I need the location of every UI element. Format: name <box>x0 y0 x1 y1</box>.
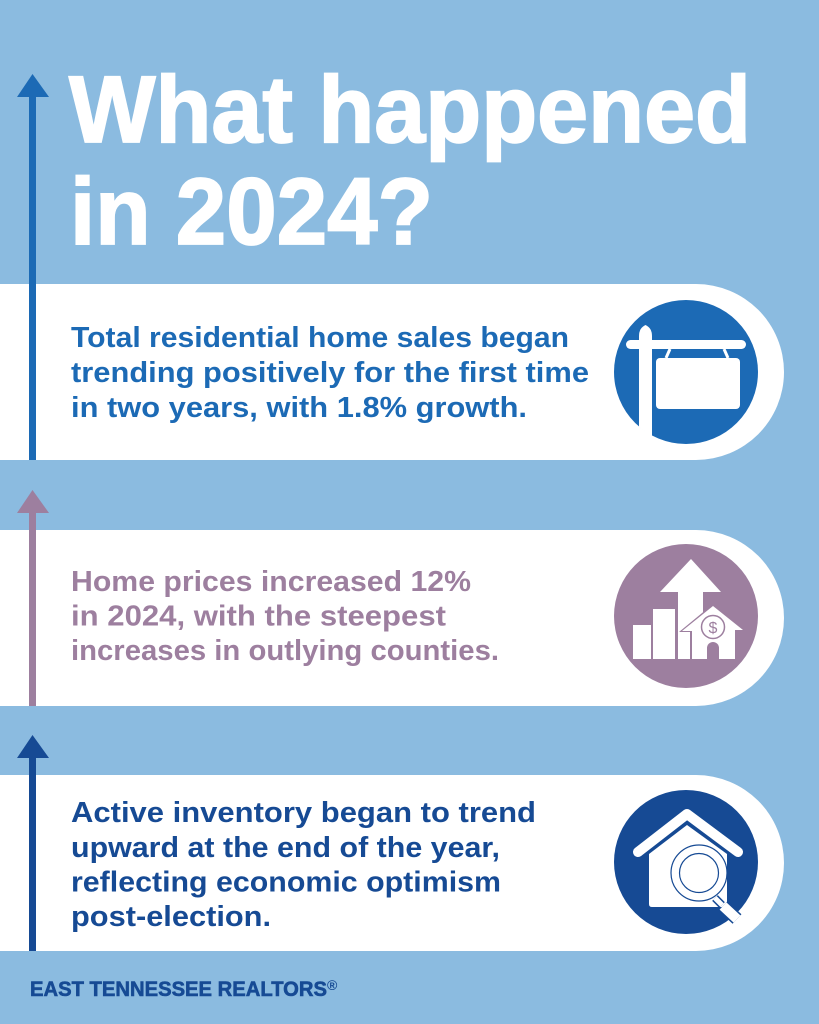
arrow: mauve <box>17 490 49 706</box>
footer logo text: EAST TENNESSEE REALTORS <box>30 978 327 1001</box>
text: home prices <box>71 566 499 667</box>
icon: house with magnifier <box>614 790 758 934</box>
title: in 2024? <box>70 159 433 265</box>
text: home prices: increases in outlying counties. <box>71 635 499 667</box>
text: home sales: trending positively for the first time <box>71 357 589 389</box>
footer logo text: ® <box>327 977 338 993</box>
title <box>69 57 751 265</box>
arrow: navy <box>17 735 49 951</box>
arrow: blue <box>17 74 49 460</box>
panel: home prices <box>0 530 784 706</box>
text: home sales: Total residential home sales began <box>71 322 569 354</box>
text: home sales <box>71 322 589 424</box>
text: home prices: Home prices increased 12% <box>71 566 471 598</box>
text: active inventory: Active inventory began to trend <box>71 797 536 829</box>
title: What happened <box>69 57 751 163</box>
panel: home sales <box>0 284 784 460</box>
icon: rising prices house <box>614 544 758 688</box>
text: home prices: in 2024, with the steepest <box>71 600 446 632</box>
icon: for sale sign <box>614 300 758 444</box>
text: active inventory: upward at the end of the year, <box>71 832 500 864</box>
text: active inventory: reflecting economic optimism <box>71 866 501 898</box>
text: active inventory <box>71 797 536 933</box>
text: active inventory: post-election. <box>71 901 271 933</box>
icon: rising prices house: $ <box>709 620 718 637</box>
panel: active inventory <box>0 775 784 951</box>
text: home sales: in two years, with 1.8% growth. <box>71 392 527 424</box>
